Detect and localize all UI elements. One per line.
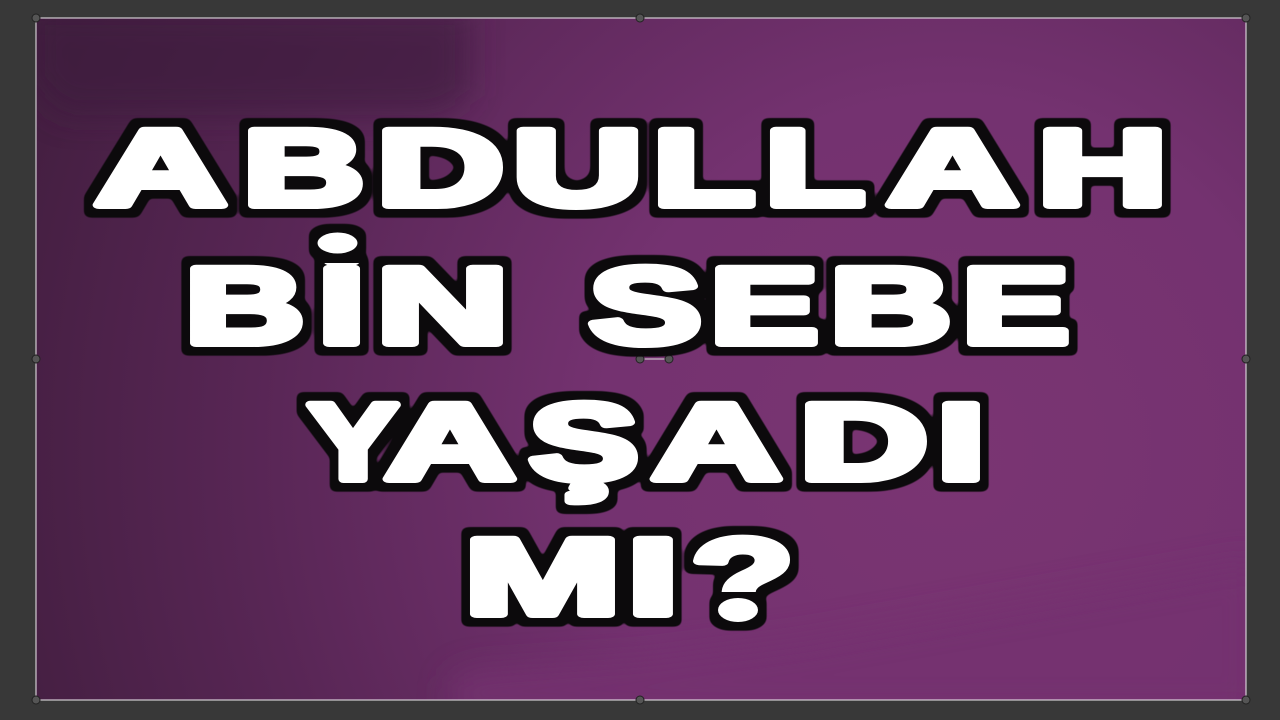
title line 3: YAŞADI: Y bbox=[308, 381, 398, 502]
title line 3: YAŞADI: D bbox=[800, 381, 928, 502]
title line 2: BİN SEBE bbox=[185, 232, 1069, 366]
title line 3: YAŞADI: A bbox=[652, 381, 781, 502]
title line 1: ABDULLAH: A bbox=[95, 107, 226, 228]
title line 2: BİN SEBE: E bbox=[962, 245, 1069, 366]
title line 2: BİN SEBE: B bbox=[185, 245, 304, 366]
title line 3: YAŞADI bbox=[308, 381, 985, 502]
light smudge bottom bbox=[458, 677, 540, 700]
title line 4: MI?: I bbox=[628, 516, 678, 637]
title line 3: YAŞADI: A bbox=[385, 381, 515, 502]
title line 1: ABDULLAH: D bbox=[377, 107, 504, 228]
dark smudge top left bbox=[106, 18, 476, 118]
title line 4: MI? bbox=[464, 516, 794, 637]
title line 4: MI?: ? bbox=[692, 516, 794, 637]
title line 2: BİN SEBE: S bbox=[589, 245, 702, 366]
title line 1: ABDULLAH: A bbox=[887, 107, 1018, 228]
title line 1: ABDULLAH bbox=[95, 107, 1167, 228]
title line 3: YAŞADI: Ş bbox=[529, 381, 638, 502]
title line 1: ABDULLAH: L bbox=[765, 107, 865, 228]
title line 1: ABDULLAH: B bbox=[243, 107, 364, 228]
title line 1: ABDULLAH: H bbox=[1038, 107, 1167, 228]
title line 1: ABDULLAH: U bbox=[512, 107, 642, 228]
title line 1: ABDULLAH: L bbox=[653, 107, 755, 228]
title line 2: BİN SEBE: B bbox=[830, 245, 951, 366]
title line 2: BİN SEBE: E bbox=[710, 245, 818, 366]
title line 3: YAŞADI: I bbox=[937, 381, 985, 502]
title line 2: BİN SEBE: İ bbox=[318, 245, 365, 366]
title line 4: MI?: M bbox=[464, 516, 621, 637]
title line 2: BİN SEBE: N bbox=[377, 245, 508, 366]
